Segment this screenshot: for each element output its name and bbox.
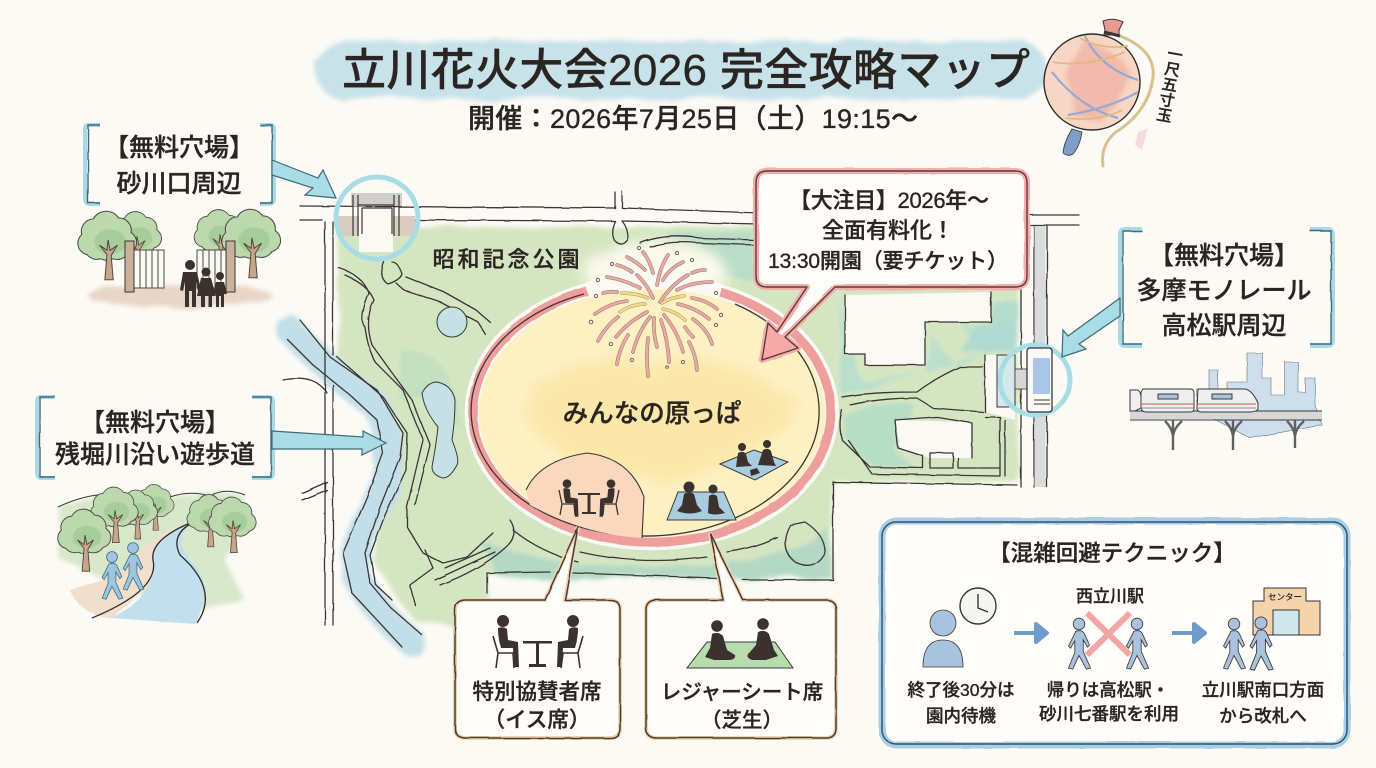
arrow — [1062, 298, 1120, 357]
title banner: 立川花火大会2026 完全攻略マップ — [342, 46, 1030, 95]
illustration: park gate with family — [78, 209, 281, 308]
callout: paid entry notice: 【大注目】2026年～ — [789, 188, 989, 213]
label: shell size: 一尺五寸玉 — [1153, 45, 1184, 124]
step 1: wait in park: 終了後30分は — [908, 680, 1014, 700]
monorail track band — [1034, 226, 1046, 487]
family figures — [180, 260, 227, 307]
special seating zone — [526, 453, 644, 538]
label: sunagawa free spot — [85, 125, 336, 204]
step 1: wait in park: 園内待機 — [926, 706, 996, 726]
label: sunagawa free spot: 【無料穴場】 — [104, 134, 254, 162]
fireworks — [589, 246, 723, 376]
ponds — [422, 307, 467, 478]
label: monorail free spot: 多摩モノレール — [1136, 277, 1312, 305]
park map — [283, 191, 1079, 647]
step 3: tachikawa south exit: 立川駅南口方面 — [1202, 680, 1324, 700]
label: zanbori river free spot: 残堀川沿い遊歩道 — [55, 441, 255, 469]
icon: water balloon firework shell — [1044, 19, 1184, 166]
icon: table and chairs — [493, 615, 583, 668]
label: sunagawa free spot: 砂川口周辺 — [116, 170, 242, 198]
panel heading: 【混雑回避テクニック】 — [988, 541, 1236, 566]
cream glow behind fireworks — [583, 242, 727, 302]
icon: table and chairs — [559, 479, 619, 517]
callout: leisure sheet seats — [646, 533, 836, 738]
white building lots — [845, 292, 1015, 458]
event date: 開催：2026年7月25日（土）19:15～ — [468, 104, 918, 134]
callout: special sponsor seats — [455, 527, 620, 738]
step 1: wait in park — [908, 588, 1014, 726]
icon: people on green sheet — [687, 618, 793, 668]
river — [290, 330, 413, 643]
icon: center building: センター — [1268, 592, 1302, 602]
field name: みんなの原っぱ — [563, 400, 741, 428]
callout: special sponsor seats: （イス席） — [484, 708, 590, 732]
sunagawa gate marker — [336, 177, 418, 259]
みんなの原っぱ oval — [471, 246, 831, 542]
step 2: avoid nishi-tachikawa — [1039, 587, 1179, 724]
arrow — [272, 160, 336, 198]
takamatsu station marker — [997, 345, 1070, 415]
arrow — [272, 431, 386, 455]
callout: leisure sheet seats: （芝生） — [701, 709, 783, 732]
callout: paid entry notice — [756, 171, 1027, 360]
arrow — [1172, 624, 1205, 642]
illustration: monorail and skyline — [1130, 353, 1322, 450]
road and path lines — [283, 191, 1079, 647]
step 3: tachikawa south exit — [1202, 588, 1324, 726]
monorail train — [1130, 389, 1258, 412]
panel: crowd avoidance techniques — [882, 521, 1347, 745]
callout: special sponsor seats: 特別協賛者席 — [472, 680, 602, 704]
step 2: avoid nishi-tachikawa: 砂川七番駅を利用 — [1039, 704, 1179, 724]
label: zanbori river free spot — [37, 397, 386, 478]
callout: paid entry notice: 全面有料化！ — [822, 218, 954, 243]
step 3: tachikawa south exit: から改札へ — [1219, 706, 1307, 726]
arrow — [1014, 624, 1047, 642]
label: zanbori river free spot: 【無料穴場】 — [80, 409, 230, 437]
step 2: avoid nishi-tachikawa: 西立川駅 — [1076, 587, 1144, 606]
illustration: riverside promenade — [58, 484, 256, 624]
walkers — [102, 543, 144, 599]
callout: paid entry notice: 13:30開園（要チケット） — [768, 250, 1008, 273]
label: monorail free spot: 【無料穴場】 — [1149, 242, 1299, 270]
callout: leisure sheet seats: レジャーシート席 — [661, 681, 823, 704]
step 2: avoid nishi-tachikawa: 帰りは高松駅・ — [1047, 680, 1169, 700]
label: monorail free spot — [1062, 229, 1333, 357]
park name: 昭和記念公園 — [432, 247, 580, 272]
diamond picnic sheet — [720, 440, 788, 480]
blue picnic sheet — [667, 482, 736, 520]
park greenery — [338, 226, 1018, 626]
label: monorail free spot: 高松駅周辺 — [1161, 312, 1287, 340]
